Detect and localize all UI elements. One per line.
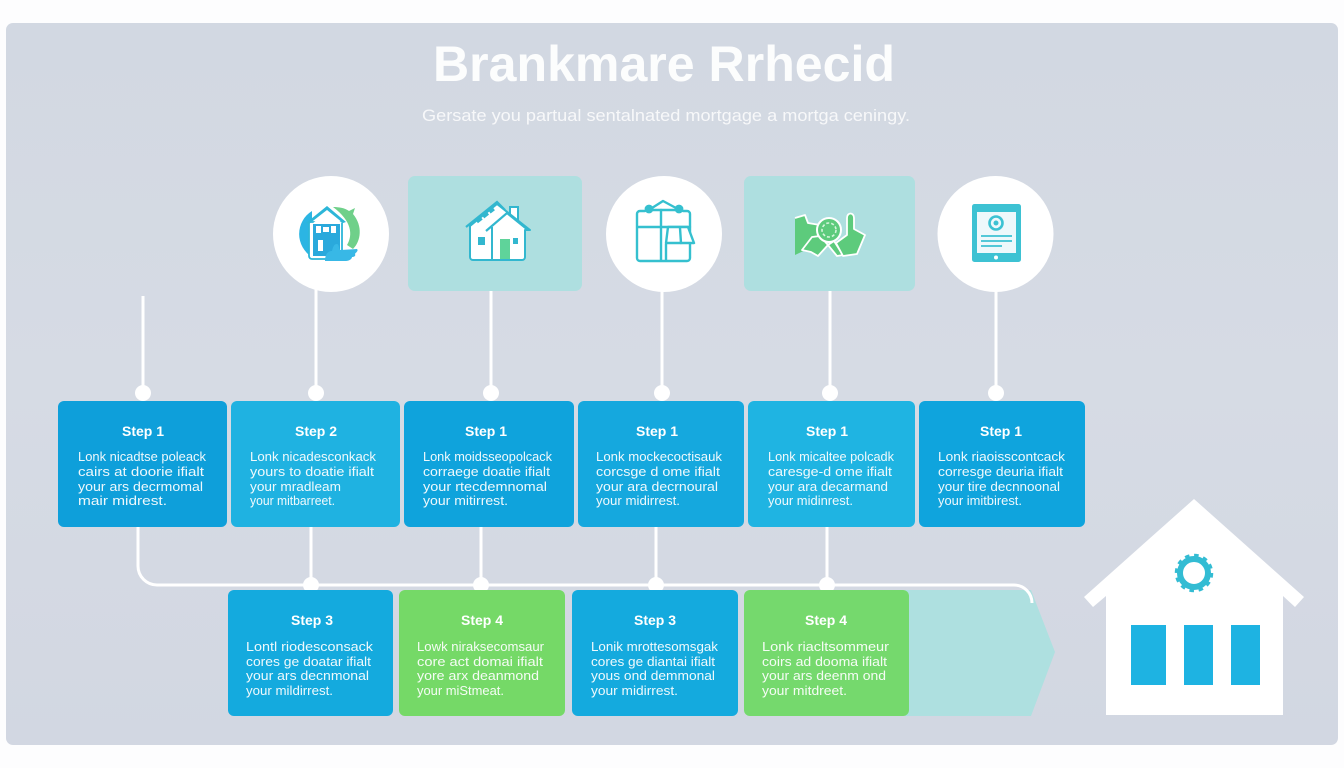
step card 5: your ara decarmand [768,480,888,494]
step card 8: Lowk niraksecomsaur [417,640,544,654]
step card 1: cairs at doorie ifialt [78,465,205,479]
step card 5: caresge-d ome ifialt [768,465,893,479]
step card 9: Lonik mrottesomsgak [591,640,719,654]
step card 4: Step 1 [636,423,678,439]
step card 1: Step 1 [122,423,164,439]
icon: gear [1176,556,1212,590]
step card 2: your mitbarreet. [250,494,335,508]
step card 1: mair midrest. [78,494,167,508]
step card 6 [919,401,1085,527]
step card 10: Lonk riacltsommeur [762,640,889,654]
step card 4: Lonk mockecoctisauk [596,450,723,464]
step card 3: your rtecdemnomal [423,480,547,494]
step card 3: your mitirrest. [423,494,508,508]
step card 7: cores ge doatar ifialt [246,655,372,669]
step card 6: Step 1 [980,423,1022,439]
icon: green map and badge on teal card [744,176,915,291]
step card 10: your ars deenm ond [762,669,886,683]
step card 4 [578,401,744,527]
step card 3 [404,401,574,527]
step card 9 [572,590,738,716]
step card 10 [744,590,909,716]
title: Brankmare Rrhecid [433,36,895,92]
step card 3: corraege doatie ifialt [423,465,551,479]
step card 2: yours to doatie ifialt [250,465,375,479]
step card 6: your tire decnnoonal [938,480,1060,494]
step card 8: Step 4 [461,612,503,628]
icon: tablet in circle [938,176,1054,292]
step card 5: Lonk micaltee polcadk [768,450,895,464]
step card 6: your imitbirest. [938,494,1022,508]
step card 3: Lonk moidsseopolcack [423,450,553,464]
step card 1 [58,401,227,527]
icon: calendar blocks in circle [606,176,722,292]
step card 6: corresge deuria ifialt [938,465,1064,479]
upper connector stems [135,288,1004,401]
subtitle: Gersate you partual sentalnated mortgage a mortga ceningy. [422,106,910,125]
step card 9: Step 3 [634,612,676,628]
step card 2: Lonk nicadesconkack [250,450,377,464]
step card 7 [228,590,393,716]
step card 1: Lonk nicadtse poleack [78,450,207,464]
icon: large house with gear and windows [1084,499,1304,715]
step card 8: your miStmeat. [417,684,504,698]
step card 4: your ara decrnoural [596,480,718,494]
step card 2: Step 2 [295,423,337,439]
step card 4: corcsge d ome ifialt [596,465,721,479]
step card 9: yous ond demmonal [591,669,715,683]
step card 4: your midirrest. [596,494,680,508]
step card 7: Step 3 [291,612,333,628]
step card 5: your midinrest. [768,494,853,508]
lower connector track [138,527,1032,603]
step card 1: your ars decrmomal [78,480,203,494]
step card 7: your mildirrest. [246,684,333,698]
step card 6: Lonk riaoisscontcack [938,450,1066,464]
step card 8: core act domai ifialt [417,655,544,669]
step card 2 [231,401,400,527]
arrow band behind lower cards [905,590,1055,716]
step card 7: your ars decnmonal [246,669,369,683]
step card 8 [399,590,565,716]
step card 10: Step 4 [805,612,847,628]
step card 9: your midirrest. [591,684,678,698]
step card 3: Step 1 [465,423,507,439]
step card 9: cores ge diantai ifialt [591,655,716,669]
step card 10: your mitdreet. [762,684,847,698]
step card 5: Step 1 [806,423,848,439]
step card 8: yore arx deanmond [417,669,539,683]
step card 10: coirs ad dooma ifialt [762,655,888,669]
step card 5 [748,401,915,527]
icon: house on teal card [408,176,582,291]
step card 7: Lontl riodesconsack [246,640,374,654]
icon: house with hand in circle [273,176,389,292]
step card 2: your mradleam [250,480,341,494]
